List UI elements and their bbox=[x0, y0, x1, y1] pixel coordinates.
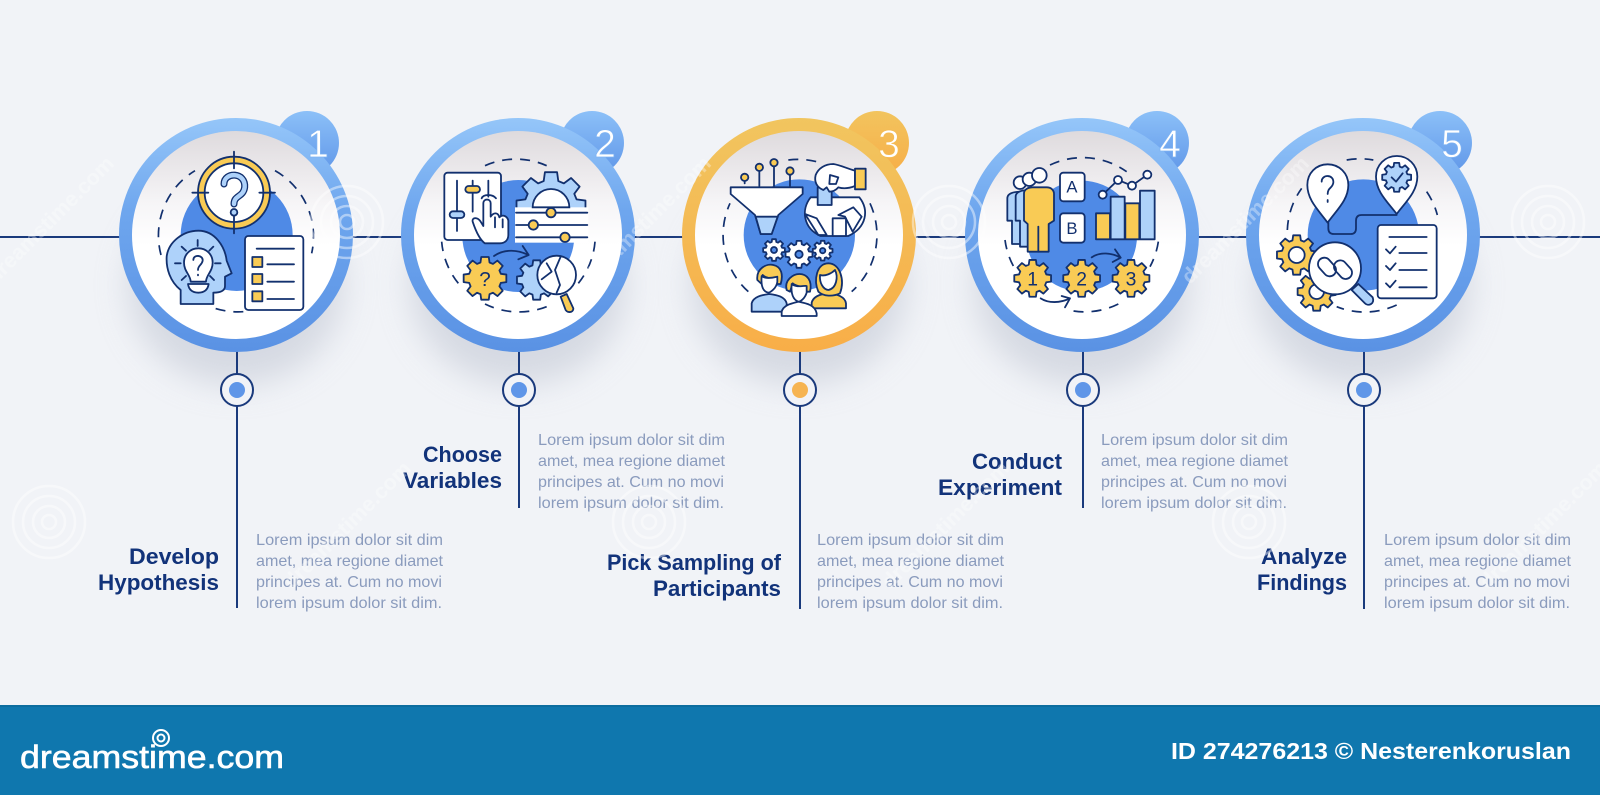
step 2 text: amet, mea regione diamet bbox=[538, 453, 726, 470]
step 5 bbox=[1246, 111, 1572, 612]
step 5 text: amet, mea regione diamet bbox=[1384, 553, 1572, 570]
step 5 number badge bbox=[1408, 111, 1472, 175]
step 5 text: lorem ipsum dolor sit dim. bbox=[1384, 595, 1570, 612]
icon: hypothesis bbox=[158, 152, 314, 312]
icon: findings bbox=[1277, 156, 1437, 312]
step 2 text bbox=[538, 432, 726, 512]
step 3 text: lorem ipsum dolor sit dim. bbox=[817, 595, 1003, 612]
step 2 shadow bbox=[410, 185, 626, 385]
step 3 heading: Participants bbox=[653, 576, 781, 601]
step 1 ring bbox=[119, 118, 353, 352]
step 5 heading: Findings bbox=[1257, 570, 1347, 595]
step 1 stem and node bbox=[221, 350, 253, 608]
step 4 text bbox=[1101, 432, 1289, 512]
step 1 text: principes at. Cum no movi bbox=[256, 574, 442, 591]
step 2 text: principes at. Cum no movi bbox=[538, 474, 724, 491]
watermark overlay: dreamstime.com bbox=[1177, 152, 1314, 289]
step 5 heading: Analyze bbox=[1261, 544, 1347, 569]
step 5 ring bbox=[1246, 118, 1480, 352]
step 3 heading: Pick Sampling of bbox=[607, 550, 782, 575]
step 1 heading: Develop bbox=[129, 544, 219, 569]
step 5 disc bbox=[1259, 131, 1467, 339]
step 4 text: principes at. Cum no movi bbox=[1101, 474, 1287, 491]
step 2 ring bbox=[401, 118, 635, 352]
step 3 text: principes at. Cum no movi bbox=[817, 574, 1003, 591]
step 4 text: Lorem ipsum dolor sit dim bbox=[1101, 432, 1288, 449]
step 1 disc bbox=[132, 131, 340, 339]
horizontal timeline bbox=[0, 236, 1600, 238]
step 5 number: 5 bbox=[1441, 123, 1463, 166]
step 1 heading bbox=[98, 544, 219, 595]
icon: experiment: B bbox=[1066, 219, 1078, 238]
step 4 text: amet, mea regione diamet bbox=[1101, 453, 1289, 470]
image credit: ID 274276213 © Nesterenkoruslan bbox=[1171, 738, 1571, 764]
step 1 heading: Hypothesis bbox=[98, 570, 219, 595]
icon: experiment: 3 bbox=[1126, 269, 1136, 290]
step 1 text: amet, mea regione diamet bbox=[256, 553, 444, 570]
step 2 heading: Variables bbox=[403, 468, 502, 493]
step 1 text: lorem ipsum dolor sit dim. bbox=[256, 595, 442, 612]
step 1 number badge bbox=[275, 111, 339, 175]
watermark overlay bbox=[0, 152, 1600, 594]
step 5 text: Lorem ipsum dolor sit dim bbox=[1384, 532, 1571, 549]
icon: experiment: A bbox=[1066, 178, 1078, 197]
step 1 number: 1 bbox=[307, 123, 329, 166]
step 3 shadow bbox=[691, 185, 907, 385]
step 2 number: 2 bbox=[594, 123, 616, 166]
step 1 bbox=[98, 111, 444, 612]
step 2 stem and node bbox=[503, 350, 535, 508]
step 4 heading bbox=[938, 449, 1063, 500]
step 3 disc bbox=[695, 131, 903, 339]
watermark overlay: dreamstime.com bbox=[877, 457, 1014, 594]
step 3 text bbox=[817, 532, 1005, 612]
step 3 number badge bbox=[845, 111, 909, 175]
step 5 text bbox=[1384, 532, 1572, 612]
step 1 text bbox=[256, 532, 444, 612]
step 4 heading: Experiment bbox=[938, 475, 1063, 500]
step 3 text: Lorem ipsum dolor sit dim bbox=[817, 532, 1004, 549]
step 5 shadow bbox=[1255, 185, 1471, 385]
step 3 bbox=[607, 111, 1005, 612]
step 1 text: Lorem ipsum dolor sit dim bbox=[256, 532, 443, 549]
step 2 number badge bbox=[560, 111, 624, 175]
icon: sampling bbox=[723, 159, 877, 316]
step 3 heading bbox=[607, 550, 782, 601]
step 4 number: 4 bbox=[1159, 123, 1181, 166]
step 3 ring bbox=[682, 118, 916, 352]
step 4 bbox=[938, 111, 1289, 512]
step 4 disc bbox=[978, 131, 1186, 339]
step 5 heading bbox=[1257, 544, 1347, 595]
step 2 text: lorem ipsum dolor sit dim. bbox=[538, 495, 724, 512]
step 2 text: Lorem ipsum dolor sit dim bbox=[538, 432, 725, 449]
step 4 stem and node bbox=[1067, 350, 1099, 508]
step 2 bbox=[401, 111, 726, 512]
logo swirl bbox=[153, 730, 169, 746]
step 4 shadow bbox=[974, 185, 1190, 385]
step 4 heading: Conduct bbox=[972, 449, 1063, 474]
icon: experiment: 1 bbox=[1027, 269, 1038, 290]
step 4 ring bbox=[965, 118, 1199, 352]
step 1 shadow bbox=[128, 185, 344, 385]
step 2 heading bbox=[403, 442, 502, 493]
step 2 heading: Choose bbox=[423, 442, 502, 467]
step 4 number badge bbox=[1125, 111, 1189, 175]
icon: experiment: 2 bbox=[1076, 269, 1087, 290]
icon: variables: ? bbox=[479, 268, 491, 291]
step 3 stem and node bbox=[784, 350, 816, 609]
icon: experiment bbox=[1005, 158, 1158, 312]
step 2 disc bbox=[414, 131, 622, 339]
step 5 text: principes at. Cum no movi bbox=[1384, 574, 1570, 591]
watermark overlay: dreamstime.com bbox=[279, 457, 416, 594]
logo text: dreamstime.com bbox=[20, 739, 284, 775]
step 3 text: amet, mea regione diamet bbox=[817, 553, 1005, 570]
step 3 number: 3 bbox=[878, 123, 900, 166]
watermark overlay: dreamstime.com bbox=[579, 152, 716, 289]
step 4 text: lorem ipsum dolor sit dim. bbox=[1101, 495, 1287, 512]
step 5 stem and node bbox=[1348, 350, 1380, 609]
icon: variables bbox=[442, 159, 595, 312]
footer banner bbox=[0, 705, 1600, 795]
